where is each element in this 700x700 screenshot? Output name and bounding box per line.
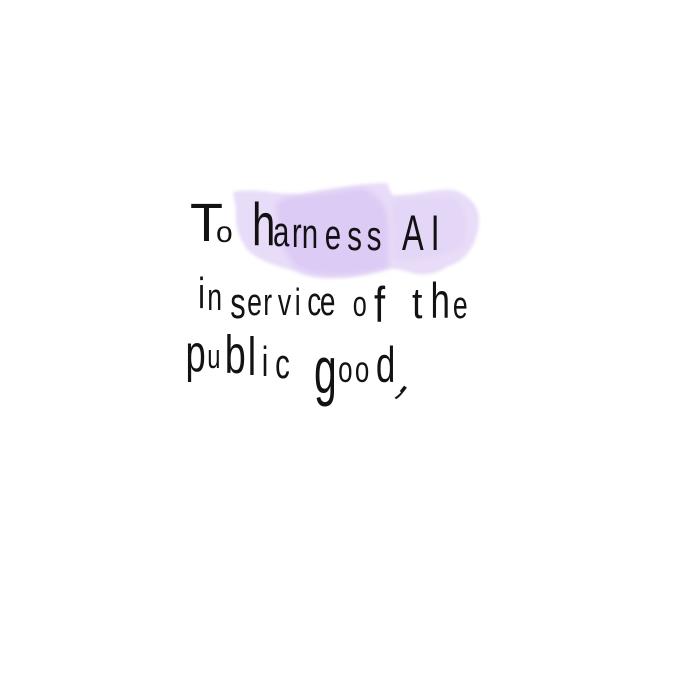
word: service: ervi (247, 280, 301, 323)
word: service: s (230, 280, 246, 328)
word: in: n (207, 275, 222, 318)
line 3: public good, (186, 323, 442, 407)
word: public: u (207, 338, 220, 376)
word: good, (314, 333, 442, 407)
icon: purple watercolour wash (233, 183, 479, 278)
word: good,: g (314, 333, 337, 407)
word: good,: oo (338, 348, 369, 390)
word: good,: d (376, 338, 395, 394)
word: of: f (374, 277, 385, 333)
word: service: ce (307, 280, 335, 324)
word: public: c (275, 340, 290, 387)
word: in: i (198, 270, 205, 318)
line 1: To harness AI (190, 191, 440, 261)
word: of (353, 277, 385, 333)
word: the (412, 274, 468, 330)
word: To: o (216, 216, 233, 249)
line 2: in service of the (198, 270, 468, 333)
word: service (230, 280, 335, 328)
word: To: T (190, 193, 223, 253)
word: of: o (353, 284, 367, 324)
word: the: h (430, 274, 450, 330)
word: the: e (453, 283, 468, 326)
word: in (198, 270, 222, 318)
word: harness (highlighted): arness (273, 208, 381, 259)
word: harness (highlighted) (252, 191, 381, 259)
word: harness (highlighted): h (252, 191, 275, 258)
word: public: p (185, 323, 206, 383)
word: public: b (225, 324, 246, 385)
word: AI: AI (402, 205, 440, 261)
word: public: i (262, 338, 268, 385)
handwritten statement (186, 191, 468, 407)
word: public: l (248, 326, 256, 387)
word: the: t (412, 278, 423, 328)
word: public (186, 323, 290, 387)
word: good,: , (388, 342, 442, 407)
